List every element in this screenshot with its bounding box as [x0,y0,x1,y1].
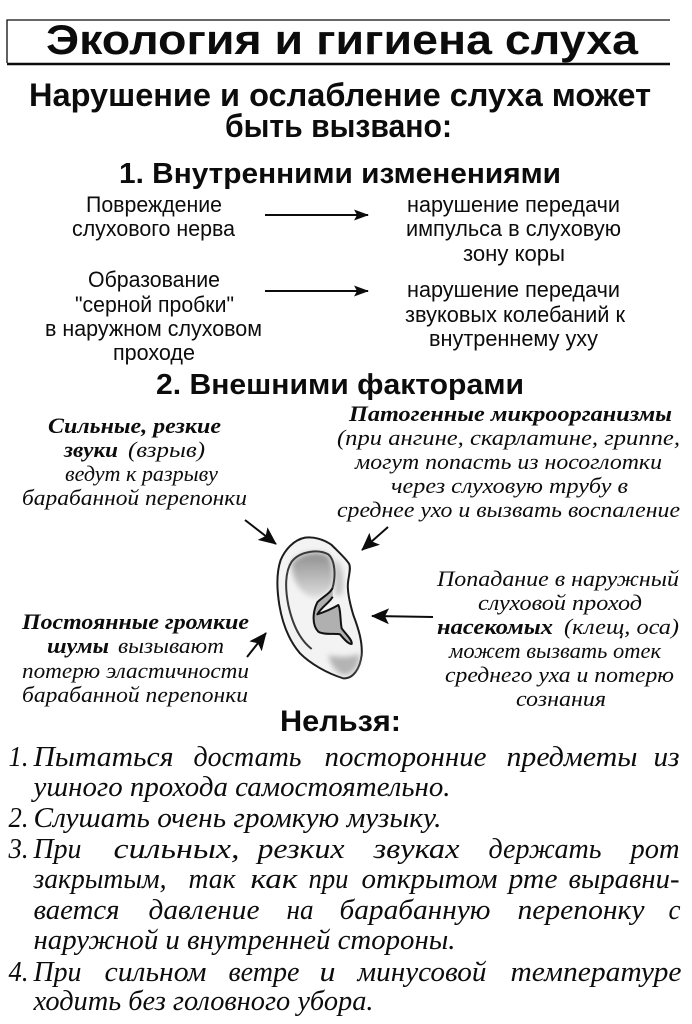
item 3: закрытым, [33,864,167,895]
item 3: открытом [362,864,498,895]
arrow: insects to ear [372,616,433,617]
arrow: wax plug to sound disruption [265,290,368,292]
text: sound vibration transmission disruption [405,277,625,351]
item 1 [8,742,680,803]
callout: loud sharp sounds: ведут к разрыву [65,461,218,486]
item 3: 3. [8,834,28,865]
text: wax plug formation: в наружном слуховом [45,316,262,341]
item 4: ходить без головного убора. [32,986,373,1017]
text: wax plug formation: проходе [113,340,195,365]
text: sound vibration transmission disruption: звуковых колебаний к [405,302,625,327]
item 1: из [654,742,680,773]
item 4: При [33,957,82,988]
text: sound vibration transmission disruption: внутреннему уху [429,326,599,351]
text: wax plug formation: Образование [88,267,220,292]
item 4: ветре [228,957,300,988]
callout: constant loud noise: вызывают [118,633,224,658]
item 4: 4. [8,957,28,988]
callout: pathogenic microorganisms: среднее ухо и вызвать воспаление [337,497,680,522]
callout: insects in the ear canal: слуховой проход [478,590,642,615]
item 1: 1. [8,742,28,773]
item 3: с [668,895,681,926]
callout: insects in the ear canal: сознания [516,686,606,711]
callout: loud sharp sounds: Сильные, резкие [48,413,221,438]
callout: constant loud noise: Постоянные громкие [21,609,249,634]
callout: insects in the ear canal: может вызвать отек [448,638,662,663]
subtitle heading [29,77,651,144]
text: impulse transmission disruption: импульса в слуховую [406,216,621,241]
subtitle heading: быть вызвано: [225,108,452,144]
item 4: температуре [510,957,682,988]
item 3: резких [255,834,345,865]
item 4: минусовой [356,957,486,988]
item 2: 2. [8,803,28,834]
callout: loud sharp sounds: барабанной перепонки [22,485,247,510]
item 2: Слушать очень громкую музыку. [34,803,442,834]
arrow: sharp sounds to ear [245,520,276,544]
callout: insects in the ear canal [436,566,679,711]
item 3: как [250,864,299,895]
item 3: барабанную [340,895,490,926]
item 4: и [320,957,336,988]
callout: pathogenic microorganisms: Патогенные микроорганизмы [348,401,672,426]
text: sound vibration transmission disruption: нарушение передачи [407,277,620,302]
callout: constant loud noise: потерю эластичности [22,658,249,683]
item 3: рте [506,864,558,895]
arrow: nerve damage to impulse disruption [265,214,368,216]
item 4 [8,957,682,1017]
item 3: держать [488,834,602,865]
callout: constant loud noise: шумы [47,633,109,658]
item 3: давление [148,895,260,926]
callout: pathogenic microorganisms: через слуховую трубу в [391,473,628,498]
text: wax plug formation: "серной пробки" [75,292,234,317]
item 3 [8,834,681,956]
subtitle heading: Нарушение и ослабление слуха может [29,77,651,113]
callout: pathogenic microorganisms: могут попасть из носоглотки [354,449,662,474]
arrow: constant noise to ear [247,633,266,657]
callout: loud sharp sounds: (взрыв) [128,437,205,462]
text: impulse transmission disruption: нарушение передачи [407,192,620,217]
text: auditory nerve damage: слухового нерва [72,216,235,241]
title banner: Экология и гигиена слуха [46,16,639,63]
callout: pathogenic microorganisms [337,401,680,522]
item 3: выравни- [568,864,680,895]
text: auditory nerve damage [72,192,235,241]
callout: insects in the ear canal: среднего уха и потерю [445,662,674,687]
item 4: сильном [104,957,207,988]
item 3: наружной и внутренней стороны. [34,925,456,956]
heading: prohibited: Нельзя: [280,705,401,738]
text: impulse transmission disruption [406,192,621,266]
callout: constant loud noise: барабанной перепонки [22,682,248,707]
item 3: При [33,834,82,865]
list: prohibited actions [8,742,682,1017]
item 3: на [286,895,314,926]
callout: pathogenic microorganisms: (при ангине, скарлатине, гриппе, [337,425,680,450]
callout: insects in the ear canal: насекомых [437,614,553,639]
text: impulse transmission disruption: зону коры [463,241,565,266]
arrow: microorganisms to ear [362,527,388,550]
item 1: Пытаться [32,742,174,773]
item 1: предметы [506,742,638,773]
icon: ear illustration [277,537,362,678]
text: wax plug formation [45,267,262,365]
text: auditory nerve damage: Повреждение [86,192,222,217]
item 1: посторонние [324,742,486,773]
callout: loud sharp sounds [22,413,247,510]
callout: loud sharp sounds: звуки [63,437,118,462]
item 3: вается [34,895,120,926]
item 3: звуках [372,834,460,865]
callout: insects in the ear canal: (клещ, оса) [564,614,679,639]
item 3: перепонку [518,895,645,926]
item 1: ушного прохода самостоятельно. [30,772,451,803]
heading: internal changes: 1. Внутренними изменениями [119,158,561,190]
callout: constant loud noise [21,609,249,707]
item 3: рот [628,834,680,865]
item 3: так [188,864,236,895]
item 3: сильных, [114,834,240,865]
heading: external factors: 2. Внешними факторами [156,369,524,401]
callout: insects in the ear canal: Попадание в наружный [436,566,679,591]
item 1: достать [194,742,302,773]
item 3: при [308,864,348,895]
